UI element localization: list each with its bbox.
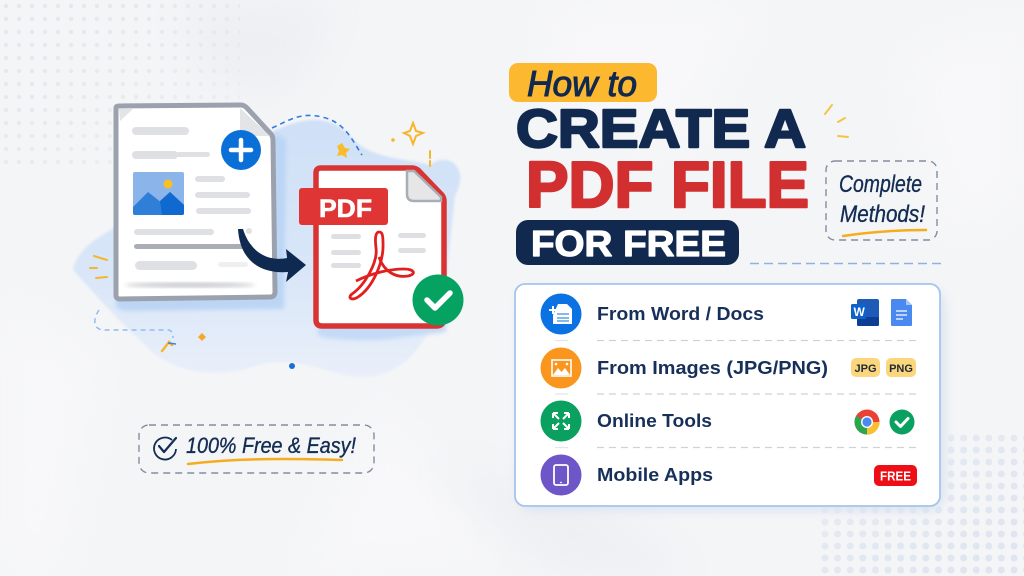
- complete methods badge: [826, 161, 937, 240]
- icon: phone: [540, 454, 582, 496]
- PDF document: [299, 168, 464, 326]
- Acrobat logo: [350, 232, 413, 299]
- row: from images: From Images (JPG/PNG): [597, 357, 828, 378]
- check badge: [412, 274, 464, 326]
- row: online tools: [540, 400, 914, 442]
- blob soft shadow under source document: [116, 132, 286, 311]
- orange underline: [843, 230, 926, 236]
- badge: 100% free and easy: 100% Free & Easy!: [186, 433, 356, 458]
- complete methods badge: Methods!: [840, 201, 925, 228]
- dashed connector bottom: [95, 310, 173, 338]
- tag: PNG: [886, 358, 916, 377]
- heading line: create a: CREATE A: [516, 99, 806, 159]
- tag: free: FREE: [880, 468, 911, 484]
- badge: 100% free and easy: [139, 425, 374, 473]
- blob soft shadow under PDF document: [318, 318, 446, 340]
- complete methods badge: Complete: [839, 171, 922, 198]
- row: from word / docs: From Word / Docs: [597, 303, 764, 324]
- PDF tag: [299, 188, 388, 225]
- illustration: document to PDF conversion: [73, 105, 464, 377]
- icon: microsoft word: [851, 299, 879, 326]
- panel: conversion methods: [515, 284, 944, 510]
- icon: expand arrows: [540, 400, 582, 442]
- PDF tag: PDF: [319, 195, 372, 223]
- icon: green check: [890, 410, 914, 434]
- icon: microsoft word: W: [854, 305, 866, 319]
- row: from images: [540, 348, 916, 388]
- text lines: [132, 127, 252, 270]
- tag: PNG: PNG: [889, 363, 913, 375]
- heading line: pdf file: PDF FILE: [526, 148, 809, 221]
- row: mobile apps: Mobile Apps: [597, 464, 713, 485]
- PDF folded corner: [407, 171, 441, 201]
- icon: chrome: [854, 410, 880, 435]
- checkmark icon: [154, 437, 176, 459]
- folded corner: [240, 108, 270, 136]
- sparkles and dots: [90, 123, 430, 369]
- plus badge: [221, 130, 261, 170]
- curved arrow: [238, 229, 306, 282]
- for free pill: FOR FREE: [531, 223, 726, 264]
- background blue blob: [73, 120, 460, 377]
- row: from word / docs: [540, 294, 912, 334]
- row: online tools: Online Tools: [597, 410, 712, 431]
- icon: image: [540, 348, 582, 388]
- image thumbnail icon: [133, 172, 184, 215]
- orange underline: [188, 459, 342, 464]
- icon: google docs: [891, 299, 912, 326]
- tag: JPG: [851, 358, 880, 377]
- source document: [116, 105, 275, 299]
- how to label: How to: [527, 63, 637, 104]
- sparkle lines near title: [825, 105, 848, 137]
- row: mobile apps: [540, 454, 917, 496]
- tag: free: [874, 465, 917, 486]
- dashed connector top: [272, 115, 362, 155]
- top left curl: [119, 109, 133, 121]
- icon: word document: [540, 294, 582, 334]
- title block: [509, 63, 809, 265]
- tag: JPG: JPG: [854, 363, 877, 375]
- PDF text lines: [331, 233, 426, 268]
